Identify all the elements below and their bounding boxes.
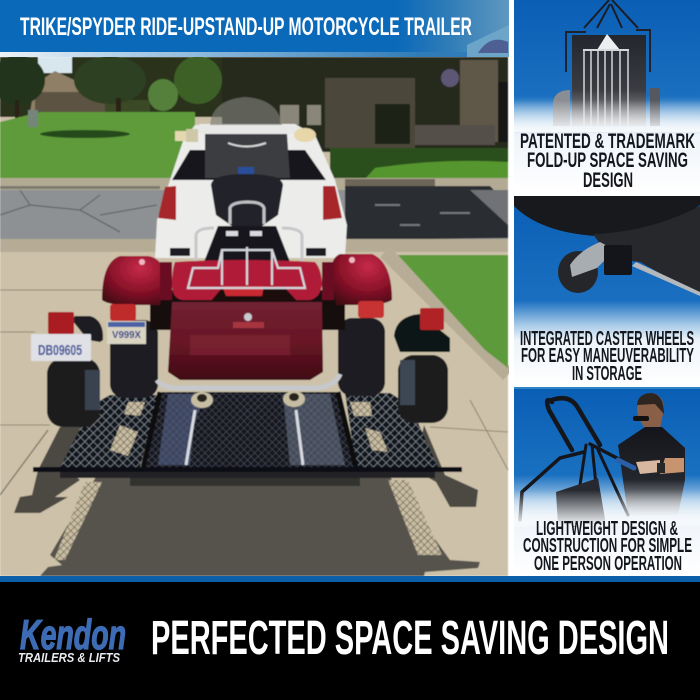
right trike tire [338,318,385,396]
license plate: trailer [31,334,91,361]
left trike tire [110,320,158,398]
text: caster wheels: IN STORAGE [572,363,642,385]
white column divider [509,0,700,576]
icon: caster wheel [558,242,632,293]
footer band [0,576,700,700]
icon: folded trailer [514,0,700,132]
right fender [322,254,392,318]
trike seat backrest [211,174,283,226]
lawn [0,110,508,179]
sidewalk and road [0,178,508,253]
windshield and mirrors [175,97,316,178]
logo: Kendon Trailers & Lifts: Kendon [20,611,126,658]
folded trailer frame [520,398,636,525]
trailer rear crossbar [33,467,462,486]
left outer trailer wheel [47,312,103,427]
chrome luggage rack [188,247,305,288]
fold-up trailer deck [60,391,438,468]
chrome bumper [157,374,340,388]
trike seat and bars [170,202,326,262]
driveway [0,252,508,576]
main photo: trike on fold-up trailer [0,55,508,576]
background: sky, trees and houses [0,55,508,152]
header banner [0,0,509,57]
trunk upper lid [172,260,322,302]
logo: Kendon Trailers & Lifts: TRAILERS & LIFTS [18,650,120,665]
logo: Kendon Trailers & Lifts [18,611,126,665]
text: caster wheels [520,328,694,385]
tire arc [514,196,700,236]
text: patented design [520,130,695,192]
license plate: trike: V999X [112,330,141,341]
blue divider line between panels [514,387,700,389]
panel: lightweight design [514,389,700,576]
text: patented design: DESIGN [583,169,633,192]
trunk lower body [168,302,323,380]
right outer trailer wheel [394,308,450,423]
panel: fold-up space saving design [514,0,700,192]
grass strip right [398,255,508,368]
license plate: trailer: DB09605 [38,342,82,359]
man lifting trailer [618,393,685,515]
white car [155,124,347,258]
white fade behind text [514,490,700,526]
license plate: trike [107,321,146,344]
text: lightweight design [523,518,692,575]
trailer frame [593,206,700,296]
frame rail [632,262,700,296]
panel: caster wheels [514,196,700,386]
body shadow [150,290,345,330]
left fender [102,256,172,321]
driveway shadows [14,425,480,576]
